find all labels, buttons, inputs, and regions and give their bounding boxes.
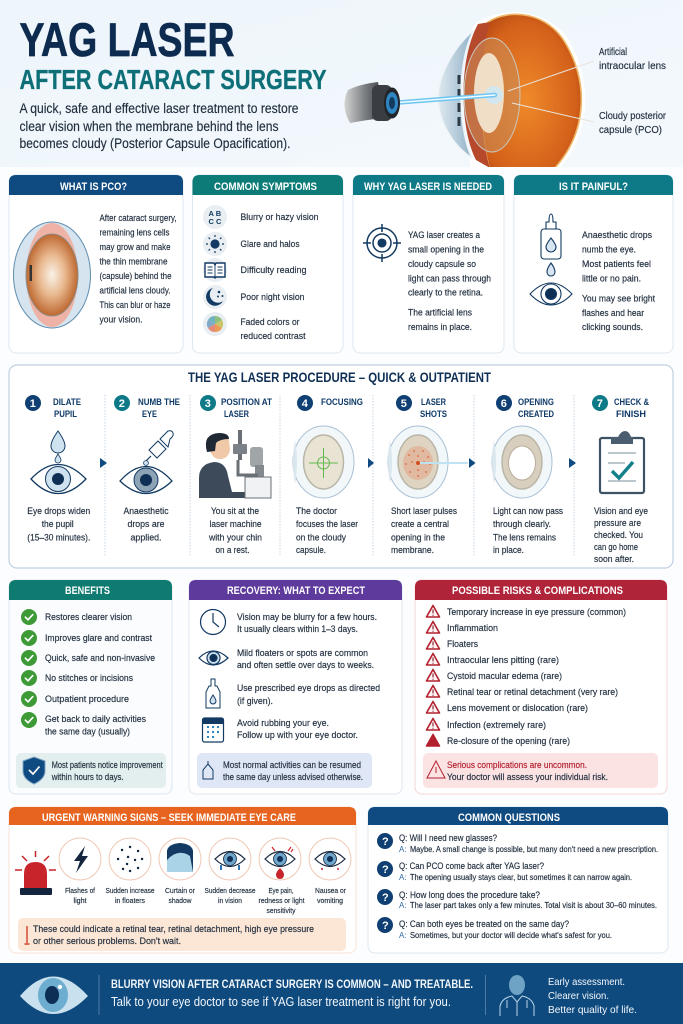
step 3: You sit at the <box>211 506 259 516</box>
question 2 <box>377 860 632 882</box>
text block: light can pass through <box>408 273 491 283</box>
risk list: Intraocular lens pitting (rare) <box>447 655 559 665</box>
step 6: 6 <box>501 398 507 410</box>
risk list: Retinal tear or retinal detachment (very rare) <box>447 687 618 697</box>
step 4 <box>293 395 363 555</box>
step 3: with your chin <box>208 532 262 542</box>
step 5: create a central <box>391 519 449 529</box>
warning: curtain or shadow: shadow <box>168 896 192 905</box>
benefit list: Outpatient procedure <box>45 694 129 704</box>
intro text <box>20 101 298 151</box>
risk list: Re-closure of the opening (rare) <box>447 736 570 746</box>
warning: eye pain: Eye pain, <box>268 886 294 895</box>
risk list: Inflammation <box>447 623 498 633</box>
recovery text: and often settle over days to weeks. <box>237 660 374 670</box>
icon: glare sun <box>203 232 227 256</box>
question 2: The opening usually stays clear, but sometimes it can narrow again. <box>410 873 632 882</box>
step 7: pressure are <box>594 518 641 528</box>
warning: floaters <box>106 838 154 905</box>
arrow <box>100 458 107 468</box>
recovery text: Use prescribed eye drops as directed <box>237 683 380 693</box>
text block <box>408 230 491 332</box>
step 2: EYE <box>142 408 157 419</box>
label: artificial intraocular lens <box>599 46 666 72</box>
warning: flashes of light: light <box>74 896 87 905</box>
text block: The artificial lens <box>408 308 472 318</box>
symptom list: Faded colors or <box>240 317 300 327</box>
text block: This can blur or haze <box>100 300 170 310</box>
question 4: Sometimes, but your doctor will decide what's safest for you. <box>410 931 612 940</box>
step 6: in place. <box>493 545 524 555</box>
label: cloudy posterior capsule: Cloudy posterior <box>599 110 666 122</box>
icon: target <box>363 224 401 262</box>
recovery text: Vision may be blurry for a few hours. <box>237 612 377 622</box>
label: artificial intraocular lens: Artificial <box>599 46 627 58</box>
heading: COMMON SYMPTOMS <box>214 181 317 193</box>
icon: blurry letters: A B <box>208 209 222 218</box>
panel: what is PCO <box>9 175 183 353</box>
step 3 <box>199 395 272 555</box>
title: YAG LASER <box>20 13 234 66</box>
icon: blurry letters: C C <box>208 217 222 226</box>
recovery text: (if given). <box>237 696 273 706</box>
benefit list <box>45 612 155 736</box>
step 5: opening in the <box>391 532 445 542</box>
warning: eye pain <box>258 838 305 915</box>
recovery text: It usually clears within 1–3 days. <box>237 624 358 634</box>
panel: recovery <box>189 580 402 794</box>
icon: eye drop bottle <box>206 679 220 708</box>
risk list: Lens movement or dislocation (rare) <box>447 703 588 713</box>
callout: the same day unless advised otherwise. <box>223 772 363 782</box>
icon: clock <box>200 610 226 634</box>
step 4: on the cloudy <box>296 532 346 542</box>
heading: COMMON QUESTIONS <box>458 812 560 824</box>
warning: nausea <box>309 838 351 905</box>
benefit list: Restores clearer vision <box>45 612 132 622</box>
step 7: FINISH <box>616 408 646 419</box>
risk list: Cystoid macular edema (rare) <box>447 671 562 681</box>
text block: the thin membrane <box>100 256 168 266</box>
callout: These could indicate a retinal tear, retinal detachment, high eye pressure <box>33 924 314 935</box>
question 3: The laser part takes only a few minutes. Total visit is about 30–60 minutes. <box>410 901 657 910</box>
text block: numb the eye. <box>582 244 636 254</box>
step 7: checked. You <box>594 530 643 540</box>
text block: Anaesthetic drops <box>582 230 652 240</box>
question 3: A: <box>399 901 407 910</box>
step 2: applied. <box>130 532 162 542</box>
step 4: The doctor <box>296 506 337 516</box>
step 4: focuses the laser <box>296 519 358 529</box>
icon: faded colour wheel <box>203 312 227 336</box>
warning: flashes of light: Flashes of <box>65 886 95 895</box>
step 2 <box>114 395 180 542</box>
step 5: membrane. <box>391 545 434 555</box>
text block <box>582 230 655 332</box>
warning: eye pain: redness or light <box>258 896 305 905</box>
benefit list: Get back to daily activities <box>45 714 146 724</box>
warning: curtain or shadow: Curtain or <box>165 886 196 895</box>
text block: cloudy capsule so <box>408 259 476 269</box>
text block: remains in place. <box>408 322 472 332</box>
icon: moon <box>203 285 227 309</box>
benefit checks <box>21 609 37 728</box>
text block: You may see bright <box>582 294 655 304</box>
text block: remaining lens cells <box>100 228 170 238</box>
subtitle: AFTER CATARACT SURGERY <box>20 64 326 95</box>
step 6 <box>492 395 563 555</box>
question 4 <box>377 917 612 940</box>
benefit list: No stitches or incisions <box>45 673 133 683</box>
heading: WHY YAG LASER IS NEEDED <box>364 181 492 193</box>
symptom list <box>240 212 318 341</box>
benefit list: Quick, safe and non-invasive <box>45 653 155 663</box>
step 5: Short laser pulses <box>391 506 457 516</box>
step 6: CREATED <box>518 408 554 419</box>
step 1: (15–30 minutes). <box>27 532 90 542</box>
recovery text: Mild floaters or spots are common <box>237 648 368 658</box>
panel: urgent warning signs <box>9 807 356 953</box>
text block: small opening in the <box>408 244 484 254</box>
callout: Serious complications are uncommon. <box>447 760 587 770</box>
intro text: A quick, safe and effective laser treatment to restore <box>20 101 298 116</box>
callout <box>16 753 166 788</box>
heading: RECOVERY: WHAT TO EXPECT <box>227 585 365 597</box>
icon: open book <box>203 258 227 282</box>
warning: decrease in vision: Sudden decrease <box>204 886 256 895</box>
heading <box>9 175 183 195</box>
step 3: laser machine <box>210 519 262 529</box>
icon: doctor <box>500 975 534 1016</box>
heading <box>9 580 172 600</box>
recovery text <box>237 612 380 740</box>
icon: red siren <box>15 851 56 895</box>
panel: is it painful <box>514 175 673 353</box>
panel: benefits <box>9 580 172 794</box>
step 6: OPENING <box>518 396 554 407</box>
step 6: The lens remains <box>493 532 556 542</box>
label: cloudy posterior capsule <box>599 110 666 136</box>
label: cloudy posterior capsule: capsule (PCO) <box>599 124 662 136</box>
heading <box>189 580 402 600</box>
warning: flashes of light <box>59 838 101 905</box>
question 4: Q: Can both eyes be treated on the same day? <box>399 918 569 929</box>
question 1 <box>377 832 658 854</box>
text block <box>100 213 176 324</box>
icon: calendar <box>202 718 224 742</box>
step 3: POSITION AT <box>221 396 272 407</box>
text block: little or no pain. <box>582 273 641 283</box>
text block: Most patients feel <box>582 259 651 269</box>
step 7: soon after. <box>594 554 634 564</box>
heading <box>415 580 667 600</box>
heading: URGENT WARNING SIGNS – SEEK IMMEDIATE EYE CARE <box>42 812 296 824</box>
step 7 <box>592 395 649 564</box>
text block: After cataract surgery, <box>100 213 176 223</box>
risk list: Floaters <box>447 639 478 649</box>
step 2: NUMB THE <box>138 396 180 407</box>
step 2: Anaesthetic <box>124 506 169 516</box>
warning: floaters: Sudden increase <box>106 886 154 895</box>
step 5 <box>388 395 468 555</box>
warning: nausea: Nausea or <box>315 886 347 895</box>
heading <box>9 807 356 825</box>
heading: THE YAG LASER PROCEDURE – QUICK & OUTPATIENT <box>188 369 491 385</box>
heading <box>353 175 504 195</box>
callout: Your doctor will assess your individual risk. <box>447 772 608 782</box>
step 5: SHOTS <box>420 408 447 419</box>
text block: artificial lens cloudy. <box>100 286 170 296</box>
warning icons <box>426 606 440 746</box>
text block: clearly to the retina. <box>408 287 483 297</box>
warning: curtain or shadow <box>159 838 201 905</box>
panel: common symptoms <box>192 175 343 353</box>
step 4: 4 <box>302 398 309 410</box>
call to action <box>111 978 473 1009</box>
heading: WHAT IS PCO? <box>60 181 127 193</box>
risk list <box>447 607 626 746</box>
step 1: Eye drops widen <box>27 506 90 516</box>
question 1: Maybe. A small change is possible, but many don't need a new prescription. <box>410 845 658 854</box>
symptom list: reduced contrast <box>240 331 306 341</box>
step 6: Light can now pass <box>493 506 563 516</box>
heading <box>368 807 668 825</box>
callout: Most patients notice improvement <box>52 760 163 770</box>
step 2: 2 <box>119 398 125 410</box>
tagline: Clearer vision. <box>548 990 609 1002</box>
callout: Most normal activities can be resumed <box>223 760 361 770</box>
text block: (capsule) behind the <box>100 271 172 281</box>
panel: why YAG laser is needed <box>353 175 504 353</box>
symptom list: Blurry or hazy vision <box>240 212 318 222</box>
arrow <box>368 458 374 468</box>
warning: decrease in vision <box>204 838 256 905</box>
step 1: the pupil <box>42 519 74 529</box>
hero banner <box>0 0 683 172</box>
tagline: Early assessment. <box>548 976 625 988</box>
step 3: on a rest. <box>216 545 250 555</box>
intro text: clear vision when the membrane behind the lens <box>20 119 279 134</box>
question 2: A: <box>399 873 407 882</box>
arrow <box>469 458 476 468</box>
warning: eye pain: sensitivity <box>266 906 296 915</box>
panel: risks <box>415 580 667 794</box>
icon: eye <box>199 651 228 665</box>
arrow <box>569 458 576 468</box>
tagline: Better quality of life. <box>548 1004 637 1016</box>
step 4: capsule. <box>296 545 326 555</box>
panel: procedure <box>9 365 673 568</box>
risk list: Temporary increase in eye pressure (common) <box>447 607 626 617</box>
step 6: through clearly. <box>493 519 551 529</box>
step 4: FOCUSING <box>321 396 363 407</box>
callout <box>423 753 658 788</box>
symptom list: Difficulty reading <box>240 265 306 275</box>
illustration: cloudy capsule eye <box>14 222 90 328</box>
step 2: drops are <box>128 519 164 529</box>
benefit list: the same day (usually) <box>45 726 130 736</box>
recovery text: Follow up with your eye doctor. <box>237 730 358 740</box>
step 3: LASER <box>224 408 249 419</box>
question 1: A: <box>399 845 407 854</box>
question 1: Q: Will I need new glasses? <box>399 832 497 843</box>
step 5: 5 <box>401 398 407 410</box>
call to action: BLURRY VISION AFTER CATARACT SURGERY IS COMMON – AND TREATABLE. <box>111 978 473 991</box>
benefit list: Improves glare and contrast <box>45 633 152 643</box>
heading <box>514 175 673 195</box>
icon: laser device <box>344 82 400 123</box>
intro text: becomes cloudy (Posterior Capsule Opacification). <box>20 136 290 151</box>
step 7: Vision and eye <box>594 506 648 516</box>
text block: your vision. <box>100 314 142 324</box>
question 4: A: <box>399 931 407 940</box>
question 3 <box>377 889 657 910</box>
question 2: Q: Can PCO come back after YAG laser? <box>399 860 544 871</box>
step 7: CHECK & <box>614 396 649 407</box>
recovery text: Avoid rubbing your eye. <box>237 718 329 728</box>
step 5: LASER <box>421 396 446 407</box>
tagline <box>548 976 637 1016</box>
panel: common questions <box>368 807 668 953</box>
text block: flashes and hear <box>582 308 644 318</box>
text block: clicking sounds. <box>582 322 643 332</box>
risk list: Infection (extremely rare) <box>447 720 546 730</box>
symptom list: Poor night vision <box>240 292 304 302</box>
footer band <box>0 963 683 1024</box>
icon: blurry letters <box>203 205 227 229</box>
callout <box>18 918 346 951</box>
callout: within hours to days. <box>51 772 124 782</box>
step 1: 1 <box>30 398 36 410</box>
step 1: PUPIL <box>54 408 77 419</box>
icon: eye drop bottle over eye <box>530 214 572 305</box>
heading: BENEFITS <box>65 585 110 597</box>
step 7: can go home <box>594 542 638 552</box>
step 7: 7 <box>597 398 603 410</box>
warning: nausea: vomiting <box>317 896 343 905</box>
call to action: Talk to your eye doctor to see if YAG laser treatment is right for you. <box>111 995 451 1009</box>
warning: decrease in vision: in vision <box>218 896 242 905</box>
heading: IS IT PAINFUL? <box>559 181 628 193</box>
warning: floaters: in floaters <box>115 896 145 905</box>
text block: YAG laser creates a <box>408 230 481 240</box>
callout <box>197 753 372 788</box>
question 3: Q: How long does the procedure take? <box>399 889 540 900</box>
heading <box>192 175 343 195</box>
callout: or other serious problems. Don't wait. <box>33 936 181 947</box>
icon: eye <box>20 976 88 1014</box>
text block: may grow and make <box>100 242 170 252</box>
label: artificial intraocular lens: intraocular lens <box>599 60 666 72</box>
heading: POSSIBLE RISKS & COMPLICATIONS <box>452 585 623 597</box>
step 1 <box>25 395 90 542</box>
symptom list: Glare and halos <box>240 239 300 249</box>
illustration: eye cross-section with laser <box>392 12 594 172</box>
step 1: DILATE <box>53 396 81 407</box>
step 3: 3 <box>205 398 211 410</box>
